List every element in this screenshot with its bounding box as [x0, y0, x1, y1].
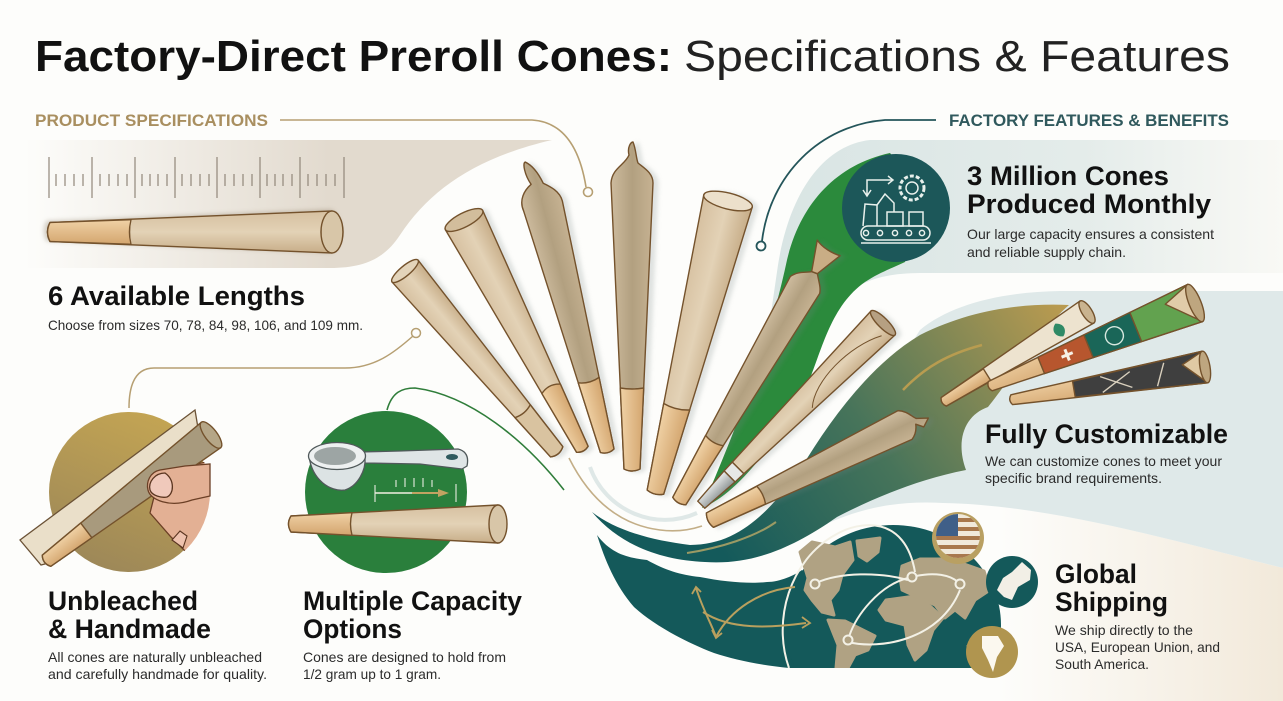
- text: lengths: Choose from sizes 70, 78, 84, 98, 106, and 109 mm.: [48, 317, 363, 333]
- tan curve: [569, 458, 702, 531]
- panel: shipping background: [943, 503, 1283, 701]
- cone 6 knotted: [664, 238, 842, 511]
- text: unbleached: [48, 649, 267, 682]
- heading: multiple capacity options: Multiple Capacity: [303, 586, 522, 616]
- text: capacity supply: [967, 226, 1214, 260]
- text: capacity supply: Our large capacity ensures a consistent: [967, 226, 1214, 242]
- text: shipping: We ship directly to the: [1055, 622, 1193, 638]
- cone: length illustration: [48, 211, 343, 253]
- text: capacity: 1/2 gram up to 1 gram.: [303, 666, 441, 682]
- route arrows: [692, 587, 810, 638]
- cone 4 twisted: [611, 142, 653, 471]
- title: [35, 32, 1230, 81]
- cone: cream branded: [935, 298, 1098, 414]
- panel: length background: [25, 140, 552, 268]
- connector: features: [756, 120, 936, 250]
- text: customizable: specific brand requirements.: [985, 470, 1162, 486]
- thumb: [148, 464, 210, 503]
- icon: usa flag: [932, 512, 984, 564]
- text: unbleached: and carefully handmade for quality.: [48, 666, 267, 682]
- cone 2 open: [442, 204, 602, 461]
- section label: product specifications: PRODUCT SPECIFICATIONS: [35, 112, 268, 130]
- teal swoosh to globe: [597, 535, 880, 668]
- cone 1 open: [389, 256, 571, 465]
- heading: 3 million cones: Produced Monthly: [967, 189, 1211, 219]
- icon: capacity circle: [288, 411, 507, 573]
- panel: customizable background: [780, 291, 1283, 568]
- text: shipping: USA, European Union, and: [1055, 639, 1220, 655]
- heading: 3 million cones: [967, 161, 1211, 219]
- ruler: [49, 157, 344, 198]
- text: capacity: Cones are designed to hold from: [303, 649, 506, 665]
- text: capacity: [303, 649, 506, 682]
- cone fan: [389, 142, 934, 535]
- text: shipping: [1055, 622, 1220, 672]
- continents: [800, 538, 993, 668]
- panel: capacity background: [770, 140, 1283, 320]
- gold accent lower streak: [687, 522, 776, 553]
- cone 5 open: [631, 187, 754, 500]
- heading: 6 available lengths: 6 Available Lengths: [48, 281, 305, 311]
- title: Specifications & Features: [684, 32, 1230, 81]
- section label: factory features: FACTORY FEATURES & BENEFITS: [949, 112, 1229, 130]
- heading: unbleached and handmade: [48, 586, 211, 644]
- icon: handmade circle: [20, 410, 225, 575]
- green swoosh: [702, 153, 930, 508]
- cone 8 knotted large: [701, 400, 934, 535]
- pale curve: [590, 467, 697, 520]
- heading: global shipping: [1055, 559, 1168, 617]
- icon: europe badge: [986, 556, 1038, 608]
- heading: fully customizable: Fully Customizable: [985, 419, 1228, 449]
- heading: global shipping: Shipping: [1055, 587, 1168, 617]
- text: customizable: We can customize cones to meet your: [985, 453, 1222, 469]
- heading: global shipping: Global: [1055, 559, 1137, 589]
- connector: capacity: [387, 388, 564, 490]
- heading: unbleached and handmade: & Handmade: [48, 614, 211, 644]
- olive teal swoosh: [592, 305, 1069, 562]
- cone 7 metal tip: [689, 307, 899, 517]
- heading: 3 million cones: 3 Million Cones: [967, 161, 1169, 191]
- connector: specifications: [280, 120, 592, 196]
- text: unbleached: All cones are naturally unbleached: [48, 649, 262, 665]
- custom branded cones: [935, 282, 1213, 416]
- text: customizable: [985, 453, 1222, 486]
- text: shipping: South America.: [1055, 656, 1149, 672]
- icon: south america badge: [966, 626, 1018, 678]
- cone 3 twisted: [511, 155, 627, 458]
- cone: black branded: [1007, 350, 1213, 416]
- cone: green and orange branded: [981, 282, 1208, 405]
- text: capacity supply: and reliable supply chain.: [967, 244, 1126, 260]
- icon: factory badge: [842, 154, 950, 262]
- title: Factory-Direct Preroll Cones:: [35, 32, 672, 81]
- heading: multiple capacity options: Options: [303, 614, 402, 644]
- icon: globe: [782, 524, 1001, 668]
- heading: unbleached and handmade: Unbleached: [48, 586, 198, 616]
- connector: handmade: [129, 328, 420, 408]
- hand: [150, 460, 215, 552]
- gold accent streak: [903, 345, 982, 390]
- heading: multiple capacity options: [303, 586, 522, 644]
